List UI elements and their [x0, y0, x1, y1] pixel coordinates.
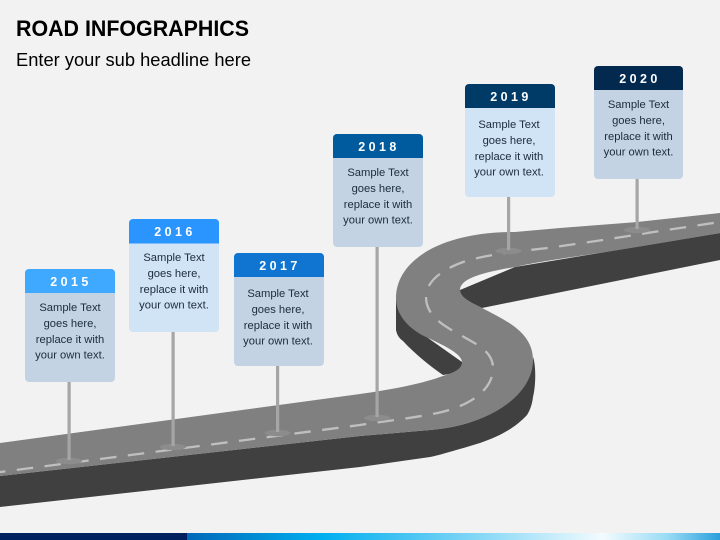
body text: your own text. [35, 350, 105, 362]
body text: Sample Text [478, 119, 541, 131]
title: ROAD INFOGRAPHICS [16, 16, 249, 41]
pole and base [496, 195, 522, 254]
pole and base [160, 330, 186, 450]
road surface [0, 213, 720, 476]
pole and base [624, 177, 650, 233]
body text: goes here, [148, 268, 200, 280]
subtitle: Enter your sub headline here [16, 50, 251, 70]
panel [333, 134, 423, 247]
road side: dark inner wall of left bend [396, 298, 462, 375]
body text: your own text. [243, 336, 313, 348]
body text: goes here, [44, 318, 96, 330]
sign 2015 [25, 269, 115, 464]
body text: Sample Text [247, 288, 310, 300]
road side: dark upper wall [460, 233, 720, 308]
body text: replace it with [140, 284, 208, 296]
body text: Sample Text [143, 252, 206, 264]
body text: your own text. [343, 214, 413, 226]
panel [594, 66, 683, 179]
year label: 2020 [619, 72, 661, 86]
panel [129, 219, 219, 332]
sign 2020 [594, 66, 683, 233]
road side: dark lower wall [0, 357, 535, 507]
sign 2018 [333, 134, 423, 421]
body text: your own text. [139, 300, 209, 312]
body text: replace it with [344, 199, 412, 211]
pole and base [364, 245, 390, 421]
panel [25, 269, 115, 382]
year label: 2018 [358, 140, 400, 154]
body text: Sample Text [39, 302, 102, 314]
bottom gradient bar [0, 533, 720, 540]
body text: your own text. [474, 166, 544, 178]
year label: 2017 [259, 259, 301, 273]
sign 2019 [465, 84, 555, 254]
pole and base [56, 380, 82, 464]
year label: 2015 [50, 275, 92, 289]
body text: replace it with [36, 334, 104, 346]
body text: goes here, [483, 135, 535, 147]
sign 2016 [129, 219, 219, 450]
body text: your own text. [604, 146, 673, 158]
year label: 2019 [490, 90, 532, 104]
body text: Sample Text [347, 167, 410, 179]
body text: replace it with [244, 320, 312, 332]
body text: goes here, [252, 304, 304, 316]
pole and base [264, 364, 290, 436]
panel [465, 84, 555, 197]
body text: goes here, [612, 115, 665, 127]
body text: goes here, [352, 183, 404, 195]
body text: replace it with [475, 151, 543, 163]
body text: Sample Text [608, 99, 670, 111]
year label: 2016 [154, 225, 196, 239]
panel [234, 253, 324, 366]
body text: replace it with [604, 131, 673, 143]
road centre dashes [0, 222, 720, 474]
sign 2017 [234, 253, 324, 436]
road illustration [0, 213, 720, 507]
